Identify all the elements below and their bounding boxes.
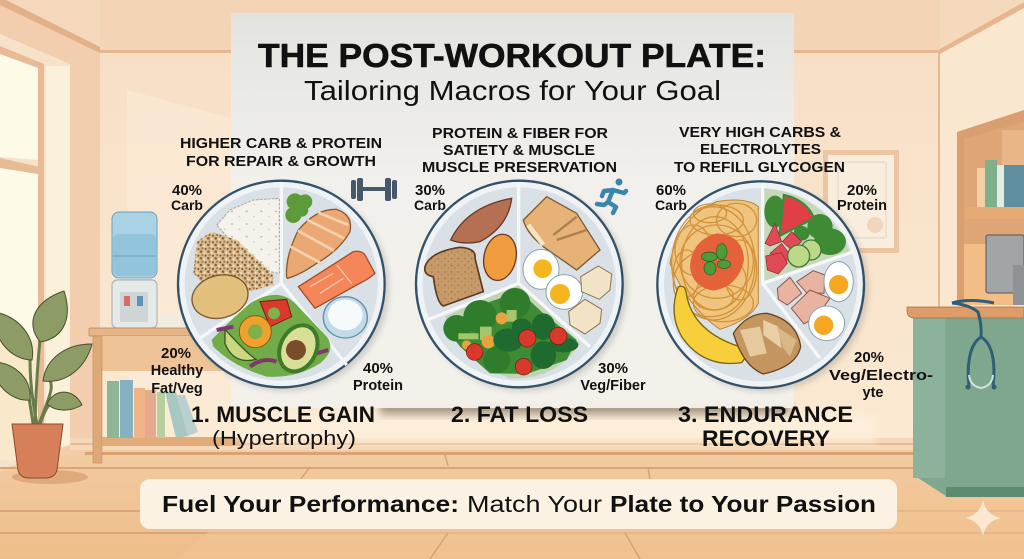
icon: runner: [597, 178, 626, 213]
macro labels: plate 2: [414, 182, 646, 394]
food: tofu cubes: [569, 266, 612, 334]
food: spaghetti with sauce and basil: [670, 200, 758, 329]
macro labels: plate 1: [151, 182, 403, 397]
plate 2: fat loss: [416, 181, 627, 391]
macro labels: plate 1: 40%: [363, 360, 393, 377]
goal name: fat loss: 2. FAT LOSS: [451, 402, 588, 427]
goal name: muscle gain: 1. MUSCLE GAIN: [191, 402, 375, 427]
title: THE POST-WORKOUT PLATE:: [258, 37, 766, 74]
plate 2 heading: fat loss rationale: MUSCLE PRESERVATION: [422, 160, 617, 176]
callout: bottom tagline: Fuel Your Performance:: [162, 491, 459, 517]
macro labels: plate 3: Carb: [655, 197, 687, 213]
plate 2 heading: fat loss rationale: SATIETY & MUSCLE: [443, 143, 595, 159]
food: rice: [217, 198, 279, 273]
plant: [0, 291, 92, 484]
plate 2 heading: fat loss rationale: PROTEIN & FIBER FOR: [432, 126, 609, 142]
goal name: endurance recovery: RECOVERY: [702, 426, 830, 451]
callout: bottom tagline: [140, 479, 897, 529]
food: quinoa: [193, 232, 273, 292]
goal name: endurance recovery: [678, 402, 853, 451]
macro labels: plate 3: Veg/Electro-: [829, 368, 933, 384]
food: broccoli, spinach and tomato: [443, 288, 578, 375]
water cooler: [112, 212, 157, 328]
macro labels: plate 3: 20%: [847, 182, 877, 199]
reception desk: [907, 307, 1024, 497]
plate 3 heading: endurance rationale: TO REFILL GLYCOGEN: [674, 160, 845, 176]
macro labels: plate 2: 30%: [598, 360, 628, 377]
plate 1 heading: muscle gain rationale: HIGHER CARB & PROTEIN: [180, 136, 382, 152]
plate 1 heading: muscle gain rationale: FOR REPAIR & GROWTH: [186, 154, 376, 170]
macro labels: plate 1: 20%: [161, 345, 191, 362]
macro labels: plate 1: Protein: [353, 378, 403, 394]
books: [107, 380, 198, 438]
panel: translucent title board: [231, 13, 875, 444]
icon: stethoscope: [952, 300, 996, 390]
goal name: muscle gain: [191, 402, 375, 450]
food: salmon: [298, 251, 375, 308]
macro labels: plate 3: 20%: [854, 349, 884, 366]
title: Tailoring Macros for Your Goal: [304, 75, 721, 106]
callout: bottom tagline: Match Your: [467, 491, 602, 517]
plate 3 heading: endurance rationale: [674, 125, 845, 176]
icon: sparkle watermark: [965, 500, 1001, 536]
macro labels: plate 1: Healthy: [151, 363, 203, 379]
plate 2 heading: fat loss rationale: [422, 126, 617, 176]
macro labels: plate 3: [655, 182, 933, 401]
food: yogurt cup: [323, 297, 367, 338]
right wall: [938, 2, 1024, 480]
side table: [89, 313, 250, 463]
goal name: endurance recovery: 3. ENDURANCE: [678, 402, 853, 427]
food: boiled eggs: [809, 262, 853, 341]
plate 3 heading: endurance rationale: ELECTROLYTES: [700, 142, 821, 158]
food: salmon fillet: [523, 197, 600, 270]
food: boiled eggs: [523, 249, 583, 309]
macro labels: plate 1: Fat/Veg: [151, 381, 203, 397]
food: crusty bread: [733, 313, 801, 374]
food: broccoli: [285, 193, 312, 223]
macro labels: plate 3: Protein: [837, 198, 887, 214]
food: potato: [187, 269, 253, 324]
plate 3 heading: endurance rationale: VERY HIGH CARBS &: [679, 125, 842, 141]
food: sweet potato: [451, 198, 512, 243]
plate 3: endurance recovery: [657, 181, 869, 392]
food: sweet potato half: [479, 231, 520, 283]
bookshelf: [957, 110, 1024, 305]
callout: bottom tagline: Plate to Your Passion: [610, 491, 876, 517]
wall certificate frame: [823, 150, 899, 253]
macro labels: plate 3: 60%: [656, 182, 686, 199]
food: banana: [674, 286, 747, 364]
title: [258, 37, 766, 106]
floor: [0, 438, 1024, 559]
macro labels: plate 3: yte: [863, 385, 883, 401]
food: chicken breast: [286, 209, 351, 278]
macro labels: plate 2: Carb: [414, 197, 446, 213]
left wall and window: [0, 0, 100, 480]
macro labels: plate 1: 40%: [172, 182, 202, 199]
goal name: muscle gain: (Hypertrophy): [212, 428, 356, 450]
icon: dumbbell: [351, 178, 397, 201]
food: tuna chunks: [777, 271, 830, 324]
macro labels: plate 2: Veg/Fiber: [580, 378, 646, 394]
food: watermelon, cucumber and greens: [764, 195, 846, 274]
plate 1 heading: muscle gain rationale: [180, 136, 382, 170]
plate 1: muscle gain: [178, 181, 389, 391]
food: salad with avocado and peppers: [212, 295, 330, 380]
macro labels: plate 2: 30%: [415, 182, 445, 199]
food: wholegrain toast: [425, 247, 483, 306]
macro labels: plate 1: Carb: [171, 197, 203, 213]
